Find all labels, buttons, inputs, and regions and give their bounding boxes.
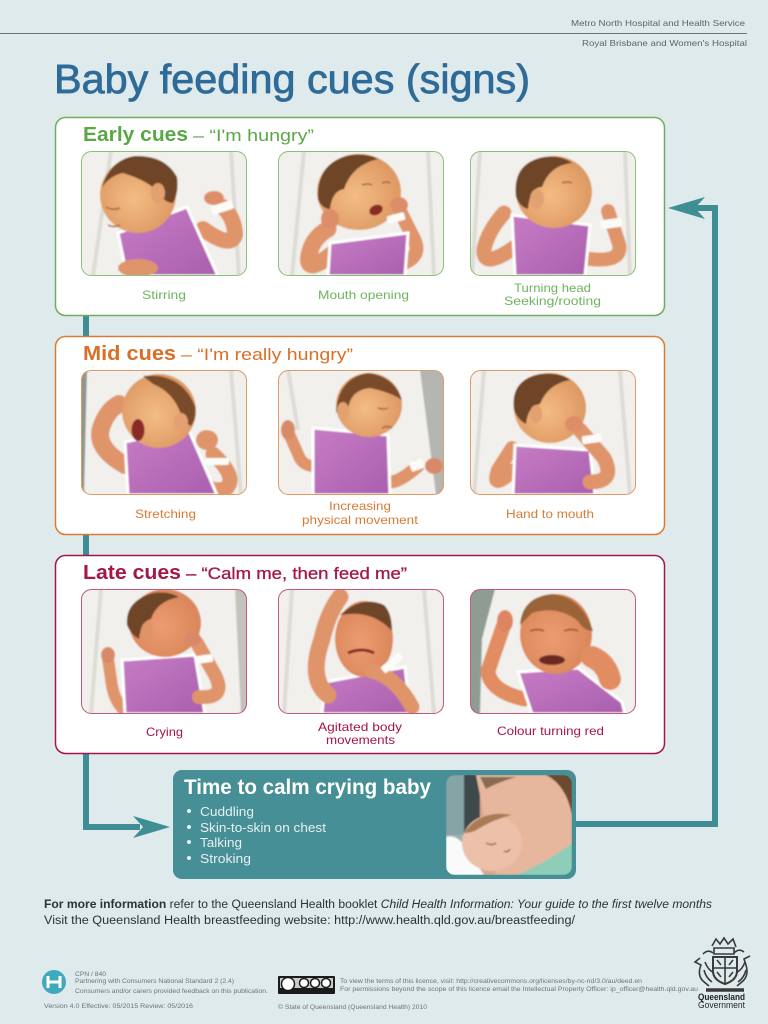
label: increasing physical movement: physical movement — [302, 513, 419, 527]
photo: stirring — [81, 151, 247, 277]
text block: more information: For more information refer to the Queensland Health booklet Child Health Information: Your guide to the first twelve months — [44, 899, 712, 911]
text block: licence: To view the terms of this licence, visit: http://creativecommons.org/licenses/by-nc-nd/3.0/au/deed.en — [340, 979, 642, 985]
heading: early cues: – “I'm hungry” — [193, 126, 314, 145]
photo: stretching — [81, 370, 247, 495]
icon: creative commons badge — [278, 976, 335, 994]
title: Baby feeding cues (signs) — [54, 56, 530, 102]
arrow: calming box back to early cues — [570, 197, 715, 824]
heading: early cues — [83, 123, 314, 146]
label: stirring: Stirring — [142, 288, 186, 302]
photo: increasing physical movement — [278, 370, 444, 495]
label: increasing physical movement — [302, 499, 419, 527]
label: colour turning red: Colour turning red — [497, 724, 604, 738]
heading: mid cues: – “I'm really hungry” — [181, 345, 353, 364]
label: turning head, seeking/rooting — [504, 281, 601, 308]
label: agitated body movements: Agitated body — [318, 720, 402, 734]
label: crying: Crying — [146, 725, 183, 739]
label: agitated body movements — [318, 720, 402, 747]
text block: more information — [44, 899, 712, 927]
text block: document details: Consumers and/or carers provided feedback on this publication. — [75, 989, 268, 995]
icon: consumer partnering logo — [42, 970, 66, 994]
header: organisation names: Metro North Hospital and Health Service — [571, 18, 745, 28]
panel: late cues — [56, 556, 664, 754]
text block: more information: Visit the Queensland Health breastfeeding website: http://www.health.qld.gov.au/breastfeeding/ — [44, 915, 576, 927]
text block: licence — [278, 979, 698, 1011]
photo: crying — [81, 589, 247, 714]
list: calming methods: Cuddling — [200, 804, 254, 819]
text block: document details: Version 4.0 Effective: 05/2015 Review: 05/2016 — [44, 1004, 194, 1010]
label: mouth opening: Mouth opening — [318, 288, 409, 302]
photo: hand to mouth — [470, 370, 636, 495]
logo: Queensland Government crest: Queensland — [698, 992, 745, 1002]
header: organisation names: Royal Brisbane and Women's Hospital — [582, 38, 747, 48]
heading: calm baby: Time to calm crying baby — [184, 776, 431, 799]
photo: colour turning red — [470, 589, 636, 714]
heading: early cues: Early cues — [83, 123, 188, 146]
text block: licence: For permissions beyond the scope of this licence email the Intellectual Property Officer: ip_officer@health.qld.gov.au — [340, 987, 698, 993]
label: turning head, seeking/rooting: Seeking/rooting — [504, 294, 601, 308]
heading: late cues: – “Calm me, then feed me” — [186, 564, 407, 583]
panel: mid cues — [56, 336, 664, 534]
photo: agitated body movements — [278, 589, 444, 714]
logo: Queensland Government crest — [695, 938, 750, 1010]
heading: mid cues: Mid cues — [83, 342, 176, 365]
text block: document details: CPN / 840 — [75, 972, 107, 978]
heading: late cues — [83, 561, 407, 584]
heading: late cues: Late cues — [83, 561, 181, 584]
logo: Queensland Government crest: Government — [698, 1000, 745, 1010]
text block: document details: Partnering with Consumers National Standard 2 (2.4) — [75, 979, 234, 985]
panel: time to calm crying baby — [173, 770, 576, 879]
label: turning head, seeking/rooting: Turning head — [514, 281, 591, 295]
list: calming methods: Talking — [200, 835, 242, 850]
heading: mid cues — [83, 342, 353, 365]
label: hand to mouth: Hand to mouth — [506, 507, 594, 521]
photo: mother and baby — [446, 775, 572, 875]
text block: document details — [44, 972, 268, 1010]
photo: turning head — [470, 151, 636, 276]
list: calming methods: Stroking — [200, 851, 251, 866]
label: stretching: Stretching — [135, 507, 196, 521]
arrow: cues down to calming box — [86, 310, 170, 838]
photo: mouth opening — [278, 151, 444, 276]
list: calming methods — [187, 804, 326, 866]
label: increasing physical movement: Increasing — [329, 499, 391, 513]
text block: licence: © State of Queensland (Queensland Health) 2010 — [278, 1004, 428, 1011]
panel: early cues — [56, 118, 664, 316]
header: organisation names — [0, 18, 747, 48]
label: agitated body movements: movements — [326, 733, 395, 747]
list: calming methods: Skin-to-skin on chest — [200, 820, 326, 835]
